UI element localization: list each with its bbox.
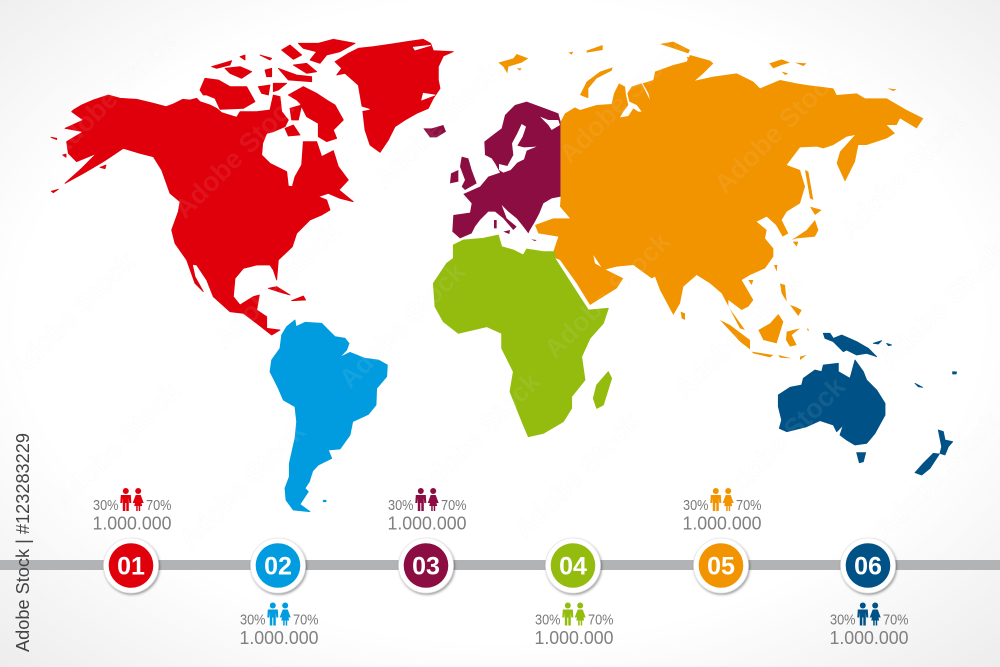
watermark: Adobe Stock: [668, 266, 807, 404]
continent: Oceania: [778, 333, 957, 475]
item 01: [92, 488, 172, 593]
badge 03: 03: [412, 552, 440, 580]
watermark: Adobe Stock: [708, 61, 847, 199]
percentages and total: 30%: [683, 498, 709, 514]
badge 05: 05: [707, 552, 735, 580]
percentages and total: 30%: [535, 612, 561, 628]
watermark: Adobe Stock: [713, 371, 852, 509]
watermark: Adobe Stock: [508, 406, 647, 544]
percentages and total: 30%: [388, 498, 414, 514]
item 05: [682, 488, 762, 593]
item 02: [240, 538, 319, 648]
badge 06: 06: [854, 552, 882, 580]
percentages and total: 70%: [736, 498, 762, 514]
percentages and total: 70%: [588, 612, 614, 628]
percentages and total: [388, 498, 467, 534]
stock id text: Adobe Stock | #123283229: [13, 433, 33, 652]
item 06: [830, 538, 909, 648]
icon: male and female figures: [120, 488, 144, 511]
percentages and total: [682, 498, 762, 534]
percentages and total: 30%: [240, 612, 266, 628]
item 03: [388, 488, 467, 593]
percentages and total: [240, 612, 319, 648]
icon: male and female figures: [562, 602, 586, 626]
icon: male and female figures: [415, 488, 439, 511]
percentages and total: 1.000.000: [92, 512, 172, 534]
island: Greenland: [335, 39, 453, 152]
badge 02: 02: [264, 552, 292, 580]
watermark: Adobe Stock: [833, 106, 972, 244]
percentages and total: 70%: [883, 612, 909, 628]
percentages and total: 70%: [146, 498, 172, 514]
percentages and total: 30%: [830, 612, 856, 628]
icon: male and female figures: [267, 602, 291, 626]
percentages and total: 30%: [93, 498, 119, 514]
percentages and total: [92, 498, 172, 534]
continent: Africa: [433, 235, 612, 437]
watermark: Adobe Stock: [538, 226, 677, 364]
percentages and total: 1.000.000: [240, 627, 318, 648]
watermark: Adobe Stock: [48, 376, 187, 514]
world map: [51, 39, 957, 512]
badge 01: 01: [117, 552, 145, 580]
percentages and total: 70%: [441, 498, 467, 514]
percentages and total: 1.000.000: [388, 512, 466, 534]
watermark: Adobe Stock: [168, 86, 307, 224]
watermark: [3, 26, 1000, 554]
watermark: Adobe Stock: [3, 246, 142, 384]
watermark: Adobe Stock: [43, 26, 182, 164]
watermark: Adobe Stock: [553, 31, 692, 169]
percentages and total: 70%: [293, 612, 319, 628]
continent: Asia: [498, 42, 923, 360]
percentages and total: [534, 612, 614, 648]
icon: male and female figures: [857, 602, 881, 626]
badge 04: 04: [559, 552, 587, 580]
watermark: Adobe Stock: [173, 416, 312, 554]
continent: North America: [51, 39, 355, 335]
percentages and total: 1.000.000: [682, 512, 762, 534]
percentages and total: 1.000.000: [830, 627, 908, 648]
continent: Europe: [423, 102, 561, 241]
timeline bar: [0, 560, 1000, 570]
percentages and total: [830, 612, 909, 648]
continent: South America: [270, 320, 387, 512]
watermark: Adobe Stock: [408, 366, 547, 504]
icon: male and female figures: [710, 488, 734, 511]
watermark: Adobe Stock: [208, 216, 347, 354]
watermark: Adobe Stock: [333, 256, 472, 394]
item 04: [534, 538, 614, 648]
watermark: Adobe Stock: [368, 56, 507, 194]
percentages and total: 1.000.000: [534, 627, 614, 648]
